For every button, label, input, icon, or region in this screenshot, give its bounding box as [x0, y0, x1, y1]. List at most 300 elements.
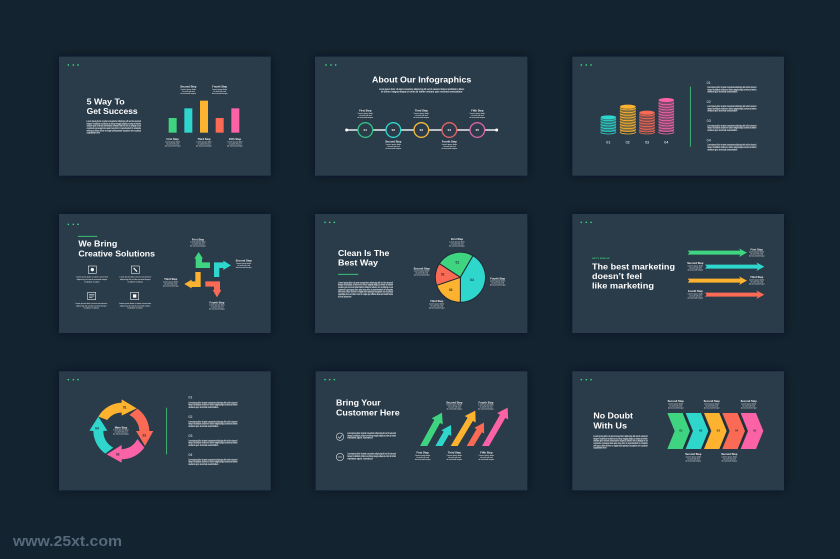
label: bottom one: Second Step: [685, 452, 702, 456]
label: top one: Lorem ipsum dolor: [668, 403, 684, 405]
arrow: yellow left: [184, 272, 201, 288]
heading: Get Success: [87, 106, 138, 116]
item 01: 01: [188, 395, 192, 399]
center label: main step: Lorem ipsum dolor: [113, 430, 129, 432]
label: first step: do eiusmod tempor: [749, 255, 765, 258]
label: fourth step: [490, 276, 506, 287]
item 01: veniam quis nostrud exercitation: [707, 91, 738, 94]
label: third step: Lorem ipsum dolor: [414, 113, 429, 115]
text block: cupidatat non: [593, 446, 607, 449]
panel: about our infographics timeline: [315, 57, 527, 176]
item 04: [707, 138, 757, 151]
heading: Clean Is The: [338, 248, 390, 258]
label: second step: Second Step: [236, 259, 252, 263]
text: feature one: Lorem ipsum dolor sit amet consectetur: [76, 276, 108, 279]
label: fourth step: [209, 300, 225, 311]
label: bottom one: do eiusmod tempor: [686, 459, 702, 462]
label: fourth step: Fourth Step: [210, 300, 225, 304]
axis labels: [606, 141, 668, 145]
text: feature one: adipiscing elit sed do eiusmod tempor: [77, 278, 108, 281]
item 01: [188, 395, 238, 409]
heading: The best marketing: [592, 261, 675, 271]
axis labels: 01: [606, 141, 610, 145]
label: fourth step: do eiusmod tempor: [209, 308, 225, 311]
heading: Bring Your: [336, 398, 381, 408]
heading: Creative Solutions: [78, 248, 155, 258]
item 04: 04: [707, 138, 711, 142]
label: first step: First Step: [417, 451, 429, 455]
label: third step: [196, 137, 212, 147]
label: third step: do eiusmod tempor: [196, 144, 212, 147]
item 03: [707, 119, 757, 132]
label: top two: [704, 399, 720, 409]
panel: no doubt with us chevrons: [572, 371, 784, 490]
text block: tempor incididunt ut labore et dolore magna aliqua ut enim ad minim: [87, 122, 141, 125]
arrow: green up: [194, 252, 210, 268]
label: fourth step: Fourth Step: [490, 276, 505, 280]
heading: [78, 239, 155, 258]
label: fourth step: Lorem ipsum dolor: [490, 281, 506, 283]
arrow: teal right: [214, 261, 231, 277]
label: fourth step: Fourth Step: [479, 400, 494, 404]
timeline: 02: [392, 128, 395, 132]
item 03: tempor incididunt ut labore et dolore magna aliqua ut enim ad minim: [188, 442, 237, 445]
label: top two: sit amet elit sed: [705, 404, 718, 407]
label: second step: do eiusmod tempor: [386, 147, 402, 150]
panel: stacked coin cylinders: [572, 57, 784, 176]
label: first step: sit amet elit sed: [166, 142, 179, 145]
item 03: [188, 434, 238, 447]
label: second step: [180, 85, 197, 95]
label: fifth step: do eiusmod tempor: [227, 144, 243, 147]
label: third step: Third Step: [164, 277, 178, 281]
label: third step: sit amet elit sed: [448, 456, 461, 459]
item 01: 01: [707, 81, 711, 85]
text block: commodo consequat duis aute irure dolor in reprehenderit in voluptate: [87, 127, 142, 130]
label: third step: Lorem ipsum dolor: [429, 303, 445, 305]
arrow: pink: [482, 408, 508, 446]
chevron row: [667, 413, 763, 449]
label: third step: [414, 109, 430, 119]
arrow: yellow: [451, 411, 476, 446]
label: top three: sit amet elit sed: [742, 404, 755, 407]
item 01: Lorem ipsum dolor sit amet consectetur adipiscing elit sed do eiusmod: [707, 86, 757, 89]
label: first step: First Step: [359, 109, 372, 113]
subtitle: [379, 88, 465, 93]
center label: main step: Main Step: [115, 425, 128, 429]
label: second step: do eiusmod tempor: [181, 92, 197, 95]
center label: main step: [113, 425, 129, 436]
chevron row: 02: [699, 429, 703, 433]
text: feature two: Lorem ipsum dolor sit amet consectetur: [119, 276, 152, 279]
heading: [593, 411, 633, 430]
label: fourth step: do eiusmod tempor: [212, 92, 228, 95]
item 01: tempor incididunt ut labore et dolore magna aliqua ut enim ad minim: [707, 88, 756, 91]
label: third step: sit amet elit sed: [415, 114, 428, 117]
label: fifth step: do eiusmod tempor: [470, 116, 486, 119]
label: second step: [414, 266, 430, 277]
cylinder 04: [659, 98, 674, 134]
text: feature three: incididunt ut labore: [84, 307, 99, 310]
text block: tempor incididunt ut labore et dolore magna aliqua ut enim ad minim: [593, 437, 648, 440]
label: bottom two: do eiusmod tempor: [722, 459, 738, 462]
arrow: teal: [705, 262, 764, 271]
chevron row: 05: [753, 429, 757, 433]
item 03: veniam quis nostrud exercitation: [188, 444, 219, 447]
text block: veniam quis nostrud exercitation ullamco laboris nisi ut aliquip ex ea: [87, 125, 142, 128]
label: fifth step: Fifth Step: [471, 109, 484, 113]
label: fourth step: Fourth Step: [688, 289, 703, 293]
panel: 5 way to get success: [59, 57, 271, 176]
label: top one: do eiusmod tempor: [668, 406, 684, 409]
label: second step: sit amet elit sed: [448, 406, 461, 409]
label: third step: Lorem ipsum dolor: [749, 279, 765, 281]
label: second step: do eiusmod tempor: [414, 274, 430, 277]
label: fifth step: Lorem ipsum dolor: [479, 455, 494, 457]
label: second step: Second Step: [414, 266, 430, 270]
label: first step: First Step: [451, 237, 463, 241]
heading: like marketing: [592, 281, 654, 291]
label: fourth step: [478, 400, 494, 411]
axis labels: 04: [664, 141, 668, 145]
label: second step: sit amet elit sed: [415, 272, 428, 275]
label: third step: do eiusmod tempor: [163, 284, 179, 287]
icon: check circle: [336, 433, 344, 440]
cylinder 01: [601, 115, 616, 134]
label: first step: do eiusmod tempor: [415, 458, 431, 461]
label: third step: Lorem ipsum dolor: [196, 141, 212, 143]
text: feature one: incididunt ut labore: [84, 280, 100, 283]
three dots: [580, 379, 592, 380]
label: second step: [446, 400, 463, 411]
label: second step: sit amet elit sed: [689, 266, 702, 269]
label: first step: sit amet elit sed: [451, 242, 463, 245]
label: fourth step: sit amet elit sed: [480, 406, 492, 409]
label: second step: Lorem ipsum dolor: [688, 265, 703, 267]
label: third step: Lorem ipsum dolor: [163, 281, 179, 283]
heading: [336, 398, 400, 417]
item 03: Lorem ipsum dolor sit amet consectetur adipiscing elit sed do eiusmod: [188, 439, 238, 442]
label: bottom two: sit amet elit sed: [723, 457, 736, 460]
label: second step: sit amet elit sed: [387, 145, 400, 148]
bar chart: [169, 101, 239, 133]
text: feature three: Lorem ipsum dolor sit amet consectetur: [75, 302, 108, 305]
text block: Lorem ipsum dolor sit amet consectetur adipiscing elit sed do eiusmod: [87, 120, 141, 123]
panel: the best marketing: [572, 214, 784, 333]
item 02: 02: [188, 415, 192, 419]
three dots: [67, 223, 79, 225]
item 03: veniam quis nostrud exercitation: [707, 129, 738, 132]
cycle arrow: teal: [89, 417, 113, 454]
arrow: coral: [467, 423, 484, 446]
label: second step: Lorem ipsum dolor: [414, 271, 430, 273]
label: third step: sit amet elit sed: [164, 282, 177, 285]
label: third step: sit amet elit sed: [430, 304, 443, 307]
label: fourth step: [212, 85, 228, 95]
text block one: tempor incididunt ut labore et dolore magna aliqua ut enim ad minim: [347, 434, 396, 437]
label: second step: Lorem ipsum dolor: [181, 89, 196, 91]
label: second step: [385, 140, 402, 150]
label: second step: Second Step: [687, 261, 704, 265]
label: first step: Lorem ipsum dolor: [749, 252, 765, 254]
label: first step: Lorem ipsum dolor: [190, 242, 206, 244]
text block: Lorem ipsum dolor sit amet consectetur adipiscing elit sed do eiusmod: [338, 281, 393, 284]
item 04: veniam quis nostrud exercitation: [188, 463, 219, 466]
item 01: veniam quis nostrud exercitation: [188, 406, 219, 409]
label: third step: [163, 277, 179, 287]
item 02: veniam quis nostrud exercitation: [188, 425, 219, 428]
label: first step: Lorem ipsum dolor: [449, 241, 465, 243]
label: fifth step: Fifth Step: [480, 451, 493, 455]
text block: velit esse cillum dolore eu fugiat nulla pariatur excepteur sint occaecat: [593, 444, 648, 447]
text: feature four: Lorem ipsum dolor sit amet consectetur: [119, 302, 151, 305]
label: second step: do eiusmod tempor: [688, 268, 704, 271]
label: fifth step: sit amet elit sed: [229, 142, 241, 145]
label: first step: sit amet elit sed: [750, 253, 763, 256]
label: top three: do eiusmod tempor: [741, 406, 757, 409]
text block: cupidatat non: [87, 132, 101, 135]
label: top three: [741, 399, 757, 409]
label: second step: Lorem ipsum dolor: [236, 263, 252, 265]
panel: we bring creative solutions: [59, 214, 271, 333]
heading: Best Way: [338, 258, 378, 268]
icon: phone box: [131, 266, 139, 273]
eyebrow: LET'S SUM UP: [592, 258, 610, 260]
three dots: [580, 221, 592, 223]
text block: veniam quis nostrud exercitation ullamco laboris nisi ut aliquip ex ea: [593, 440, 648, 443]
text: feature three: adipiscing elit sed do eiusmod tempor: [76, 304, 107, 307]
icon: square box: [131, 292, 139, 300]
watermark: www.25xt.com: [12, 533, 122, 550]
text block: commodo consequat duis aute irure dolor in reprehenderit in voluptate: [593, 442, 648, 445]
item 02: Lorem ipsum dolor sit amet consectetur adipiscing elit sed do eiusmod: [707, 105, 757, 108]
arrow: coral down: [205, 281, 221, 297]
label: first step: [165, 137, 181, 147]
text block one: Lorem ipsum dolor sit amet consectetur adipiscing elit sed do eiusmod: [347, 432, 396, 435]
label: second step: Lorem ipsum dolor: [447, 405, 462, 407]
center label: main step: do eiusmod tempor: [113, 433, 129, 436]
item 04: veniam quis nostrud exercitation: [707, 148, 738, 151]
text block two: [347, 453, 396, 460]
label: first step: Lorem ipsum dolor: [358, 113, 373, 115]
heading: [338, 248, 390, 268]
heading: We Bring: [78, 239, 117, 249]
label: third step: [447, 451, 463, 461]
label: first step: sit amet elit sed: [192, 243, 204, 246]
pie labels: 04: [470, 278, 474, 282]
label: fourth step: do eiusmod tempor: [490, 284, 506, 287]
chevron row: 03: [717, 429, 720, 433]
arrow: yellow: [688, 276, 747, 285]
subtitle: Lorem ipsum dolor sit amet consectetur adipiscing elit sed do eiusmod tempor incididunt ut labore: [379, 88, 465, 91]
heading: [592, 261, 675, 291]
text block: [338, 281, 394, 298]
item 02: tempor incididunt ut labore et dolore magna aliqua ut enim ad minim: [707, 107, 756, 110]
item 04: tempor incididunt ut labore et dolore magna aliqua ut enim ad minim: [707, 146, 756, 149]
timeline: 01: [364, 128, 367, 132]
label: bottom one: Lorem ipsum dolor: [686, 456, 701, 458]
heading: With Us: [593, 420, 627, 430]
text block: tempor incididunt ut labore et dolore magna aliqua ut enim ad minim: [338, 284, 393, 287]
text block: commodo consequat duis aute irure dolor in reprehenderit in voluptate: [338, 288, 394, 291]
label: top one: sit amet elit sed: [669, 404, 682, 407]
label: second step: do eiusmod tempor: [447, 408, 463, 411]
label: fourth step: sit amet elit sed: [443, 145, 456, 148]
three dots: [324, 379, 335, 380]
label: bottom two: Second Step: [721, 452, 738, 456]
label: third step: do eiusmod tempor: [447, 458, 463, 461]
item 04: Lorem ipsum dolor sit amet consectetur adipiscing elit sed do eiusmod: [707, 144, 757, 147]
item 01: [707, 81, 757, 94]
chevron row: 01: [679, 429, 683, 433]
label: fourth step: do eiusmod tempor: [688, 296, 704, 299]
label: fifth step: [227, 137, 243, 147]
label: fourth step: Lorem ipsum dolor: [688, 293, 703, 295]
label: fourth step: [442, 140, 458, 150]
three dots: [67, 379, 79, 380]
label: first step: Lorem ipsum dolor: [415, 455, 431, 457]
heading: doesn’t feel: [592, 271, 642, 281]
label: first step: First Step: [751, 247, 763, 251]
label: first step: First Step: [167, 137, 179, 141]
label: third step: do eiusmod tempor: [414, 116, 430, 119]
label: first step: [449, 237, 465, 247]
text block: velit esse cillum dolore eu fugiat nulla pariatur excepteur sint occaecat: [87, 129, 141, 132]
label: third step: sit amet elit sed: [198, 142, 210, 145]
icon: gear box: [88, 266, 96, 273]
label: top two: do eiusmod tempor: [704, 406, 720, 409]
label: fifth step: Lorem ipsum dolor: [227, 141, 243, 143]
arrow: green: [420, 413, 443, 446]
label: fifth step: sit amet elit sed: [480, 456, 493, 459]
label: fourth step: Fourth Step: [442, 140, 457, 144]
item 03: 03: [188, 434, 192, 438]
label: fourth step: [688, 289, 704, 299]
text block: cupidatat non proident sunt in culpa qui officia deserunt mollit anim: [338, 293, 393, 296]
label: second step: Second Step: [180, 85, 197, 89]
item 03: tempor incididunt ut labore et dolore magna aliqua ut enim ad minim: [707, 127, 756, 130]
pie labels: 01: [455, 261, 459, 265]
text block: id est laborum: [338, 295, 351, 298]
label: fourth step: do eiusmod tempor: [442, 147, 458, 150]
cycle numbers: 02: [142, 433, 146, 437]
timeline: 04: [448, 128, 451, 132]
item 01: tempor incididunt ut labore et dolore magna aliqua ut enim ad minim: [188, 404, 237, 407]
heading: [87, 96, 138, 116]
label: top one: Second Step: [668, 399, 684, 403]
axis labels: 03: [645, 141, 649, 145]
item 04: 04: [188, 453, 192, 457]
label: fourth step: sit amet elit sed: [491, 282, 504, 285]
item 02: [707, 100, 757, 113]
text block two: veniam quis nostrud: [347, 457, 373, 460]
text block: veniam quis nostrud exercitation ullamco laboris nisi ut aliquip ex ea: [338, 286, 394, 289]
cycle arrow: coral: [129, 409, 153, 446]
label: top two: Lorem ipsum dolor: [704, 403, 720, 405]
label: fifth step: Lorem ipsum dolor: [470, 113, 485, 115]
label: fifth step: do eiusmod tempor: [479, 458, 495, 461]
heading: No Doubt: [593, 411, 633, 421]
text: feature three: [75, 302, 108, 310]
label: third step: Third Step: [197, 137, 211, 141]
three dots: [580, 64, 592, 66]
item 04: tempor incididunt ut labore et dolore magna aliqua ut enim ad minim: [188, 461, 237, 464]
label: fifth step: Fifth Step: [229, 137, 241, 141]
label: third step: Lorem ipsum dolor: [447, 455, 462, 457]
item 02: tempor incididunt ut labore et dolore magna aliqua ut enim ad minim: [188, 423, 237, 426]
label: first step: [358, 109, 374, 119]
item 02: Lorem ipsum dolor sit amet consectetur adipiscing elit sed do eiusmod: [188, 420, 238, 423]
label: first step: do eiusmod tempor: [165, 144, 181, 147]
panel: circular cycle: [59, 371, 271, 490]
pie chart: [435, 252, 486, 302]
label: first step: do eiusmod tempor: [190, 245, 206, 248]
item 02: veniam quis nostrud exercitation: [707, 110, 738, 113]
timeline: [345, 123, 498, 137]
text block one: [347, 432, 396, 440]
axis labels: 02: [626, 141, 630, 145]
label: first step: [415, 451, 431, 461]
text: feature four: incididunt ut labore: [127, 307, 143, 310]
icon: ellipsis circle: [336, 453, 344, 461]
icon: document box: [88, 292, 96, 300]
label: bottom one: [685, 452, 702, 462]
label: fifth step: sit amet elit sed: [471, 114, 484, 117]
label: top two: Second Step: [704, 399, 720, 403]
label: bottom one: sit amet elit sed: [687, 457, 700, 460]
cycle numbers: [95, 406, 146, 456]
label: second step: Second Step: [446, 400, 463, 404]
label: third step: Third Step: [415, 109, 428, 113]
label: second step: [687, 261, 704, 271]
label: third step: sit amet elit sed: [750, 280, 763, 283]
label: first step: Lorem ipsum dolor: [165, 141, 181, 143]
three dots: [67, 64, 79, 66]
label: third step: Third Step: [430, 299, 444, 303]
text block one: veniam quis nostrud: [347, 437, 373, 440]
label: third step: do eiusmod tempor: [749, 282, 765, 285]
item 03: 03: [707, 119, 711, 123]
label: second step: do eiusmod tempor: [236, 266, 252, 269]
subtitle: et dolore magna aliqua ut enim ad minim veniam quis nostrud exercitation: [381, 90, 463, 93]
text block: [593, 435, 648, 449]
pie labels: 02: [441, 272, 445, 276]
label: fourth step: do eiusmod tempor: [478, 408, 494, 411]
label: first step: do eiusmod tempor: [449, 244, 465, 247]
pie labels: 03: [449, 288, 453, 292]
label: first step: First Step: [192, 237, 204, 241]
label: first step: sit amet elit sed: [359, 114, 372, 117]
label: first step: sit amet elit sed: [416, 456, 429, 459]
cycle arrow: pink: [107, 439, 144, 463]
text: feature two: incididunt ut labore: [128, 280, 143, 283]
three dots: [325, 64, 336, 66]
label: fourth step: sit amet elit sed: [213, 90, 226, 93]
text: feature two: adipiscing elit sed do eiusmod tempor: [120, 278, 151, 281]
three dots: [324, 221, 335, 223]
label: third step: Third Step: [750, 275, 764, 279]
label: third step: do eiusmod tempor: [429, 306, 445, 309]
text block two: Lorem ipsum dolor sit amet consectetur adipiscing elit sed do eiusmod: [347, 453, 396, 456]
label: fourth step: Lorem ipsum dolor: [212, 89, 228, 91]
timeline: 05: [476, 128, 479, 132]
arrow: coral: [705, 290, 764, 299]
cycle numbers: 01: [123, 406, 127, 410]
text: feature two: [119, 276, 152, 283]
panel: clean is the best way pie: [315, 214, 527, 333]
label: fourth step: sit amet elit sed: [211, 306, 223, 309]
text: feature one: [76, 276, 108, 283]
